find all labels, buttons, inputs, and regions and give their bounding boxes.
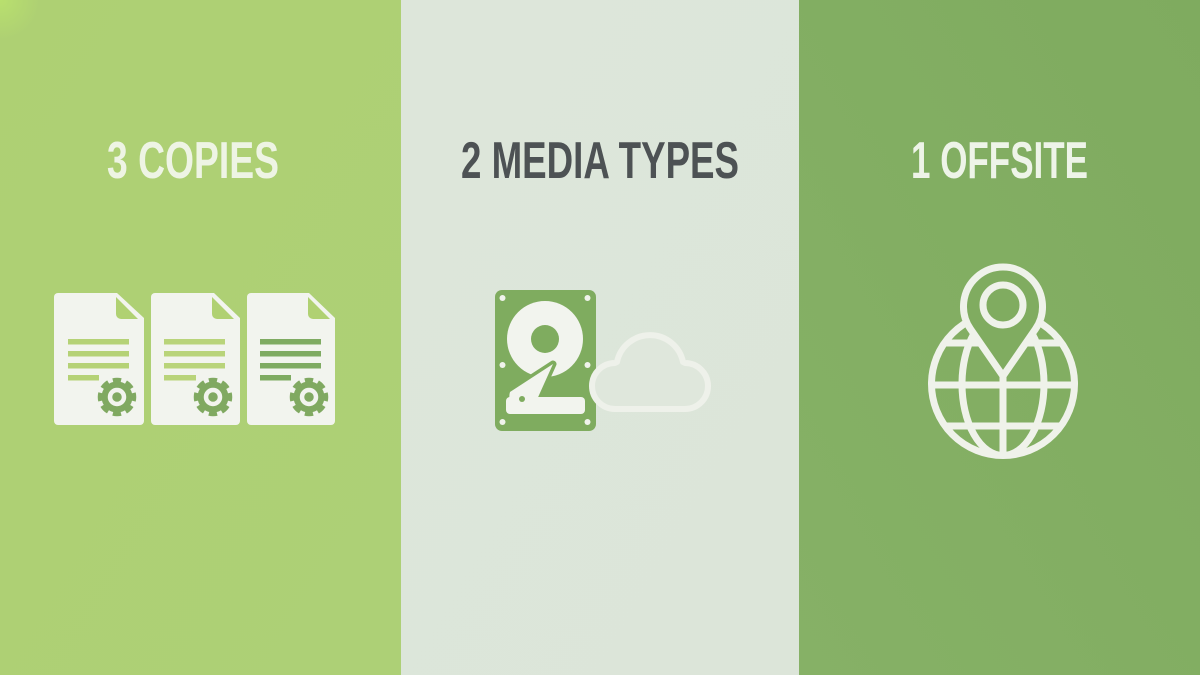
panel: 1 offsite (799, 0, 1200, 675)
icon: document 2 with gear (151, 293, 240, 425)
globe (931, 312, 1075, 456)
pin centre ring (983, 285, 1023, 325)
panel: 2 media types (401, 0, 799, 675)
heading: 3 copies: 3 COPIES (107, 132, 279, 190)
location pin (964, 267, 1042, 376)
icon: document 1 with gear (54, 293, 144, 425)
icon: hard drive (495, 290, 596, 431)
heading: 2 media types: 2 MEDIA TYPES (461, 132, 739, 190)
icon: globe with location pin (931, 267, 1075, 456)
heading: 1 offsite: 1 OFFSITE (911, 132, 1088, 190)
icon: cloud (592, 335, 708, 409)
icon: document 3 with gear (247, 293, 335, 425)
panel: 3 copies (0, 0, 401, 675)
